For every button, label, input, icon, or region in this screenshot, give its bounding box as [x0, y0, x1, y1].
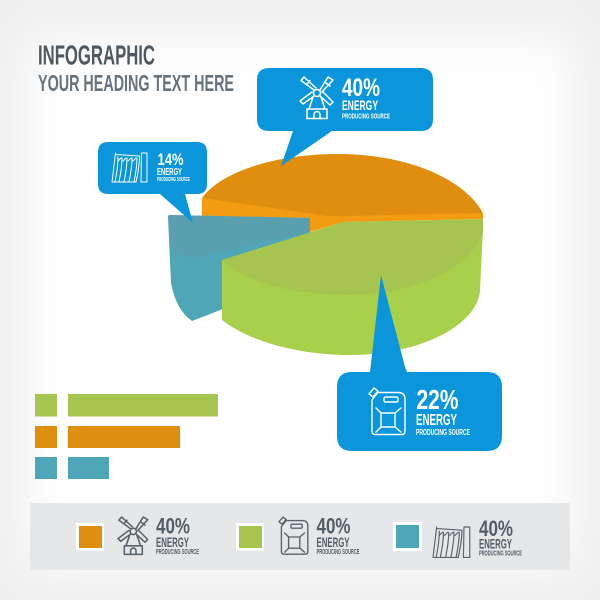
callout text: ENERGY — [342, 97, 378, 113]
callout text — [416, 384, 470, 437]
legend item: hydro: PRODUCING SOURCE — [479, 550, 522, 558]
legend item: wind — [76, 514, 199, 556]
icon: jerry can — [369, 388, 405, 434]
callout text: ENERGY — [157, 167, 182, 178]
legend item: hydro: ENERGY — [479, 536, 512, 552]
legend item: fuel — [236, 514, 360, 556]
callout text — [157, 150, 190, 183]
callout: 22% fuel — [337, 275, 502, 451]
legend item: wind: ENERGY — [156, 534, 189, 550]
teal slice — [168, 215, 310, 321]
legend item: hydro: 40% — [479, 516, 513, 541]
callout text: 14% — [158, 150, 184, 169]
legend item: wind: PRODUCING SOURCE — [156, 549, 199, 556]
orange slice — [202, 154, 483, 232]
callout: 40% wind — [257, 68, 433, 166]
callout text: PRODUCING SOURCE — [157, 177, 190, 183]
green slice — [222, 219, 483, 355]
callout: 14% hydro — [98, 142, 207, 223]
title: INFOGRAPHIC — [38, 40, 155, 70]
bar: teal — [35, 457, 109, 479]
icon: dam — [433, 527, 470, 557]
3D pie chart — [168, 154, 483, 355]
icon: dam — [112, 153, 147, 182]
legend panel — [30, 503, 570, 570]
bar: green — [35, 394, 218, 416]
callout text: PRODUCING SOURCE — [342, 112, 390, 120]
bar: orange — [35, 426, 180, 448]
legend item: wind: 40% — [156, 514, 190, 538]
icon: jerry can — [279, 517, 308, 554]
subheading: YOUR HEADING TEXT HERE — [38, 70, 234, 96]
legend item: fuel: 40% — [316, 514, 350, 538]
legend item: hydro — [393, 516, 522, 558]
legend item: fuel: ENERGY — [316, 534, 350, 550]
callout text — [342, 74, 390, 120]
callout text: PRODUCING SOURCE — [416, 428, 470, 437]
icon: windmill — [118, 517, 148, 554]
bar chart — [35, 394, 218, 479]
icon: windmill — [300, 77, 333, 118]
legend item: fuel: PRODUCING SOURCE — [316, 549, 360, 556]
callout text: 22% — [416, 384, 459, 415]
callout text: ENERGY — [416, 412, 457, 429]
callout text: 40% — [342, 74, 380, 102]
